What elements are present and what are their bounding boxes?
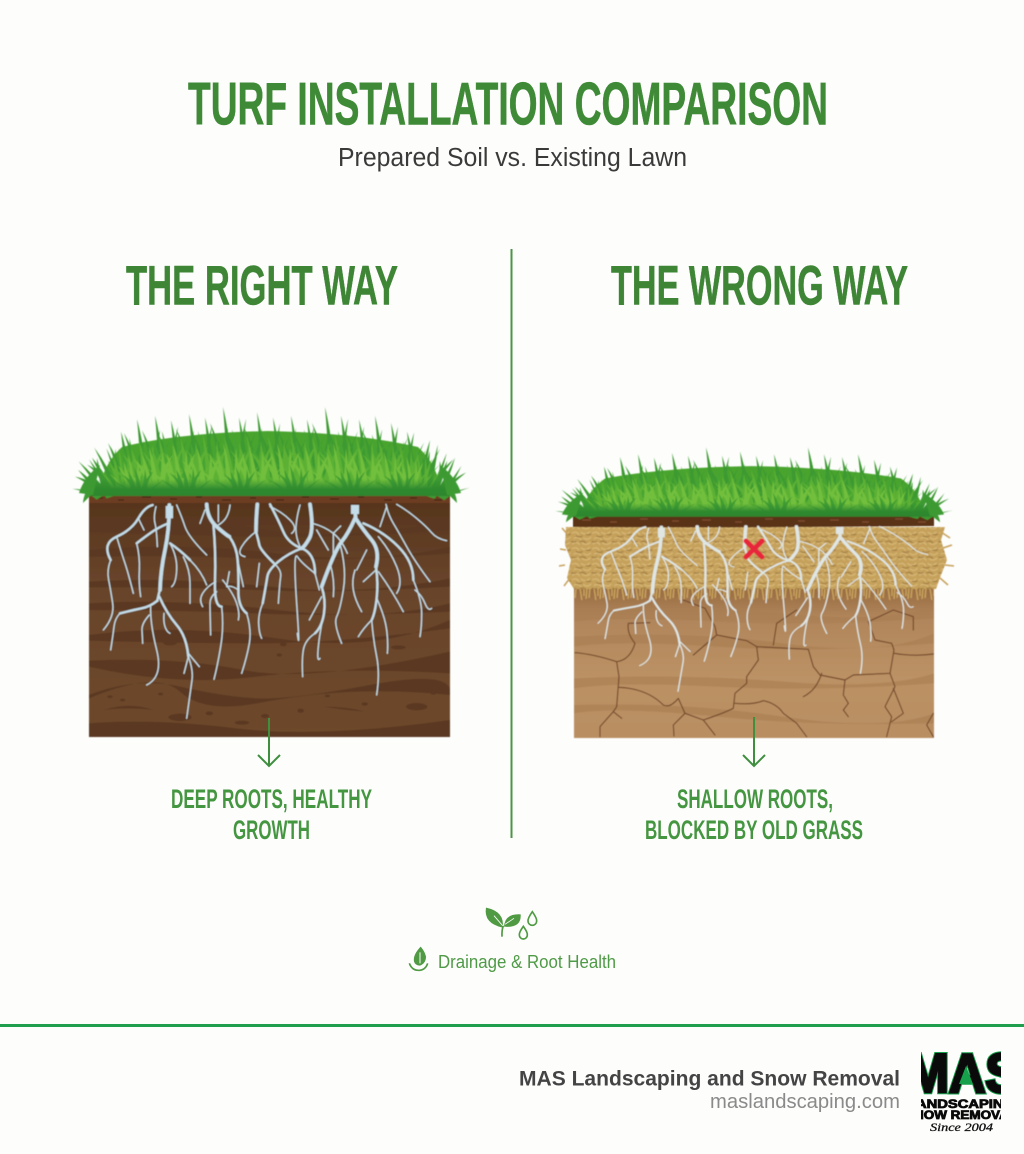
label: drainage and root health: Drainage & Root Health	[438, 952, 616, 972]
thatch side strands	[559, 528, 954, 586]
footer website: maslandscaping.com	[710, 1091, 900, 1113]
arrow: wrong way	[743, 717, 765, 766]
dry soil body	[574, 586, 934, 738]
soil body	[89, 495, 450, 737]
illustration: healthy soil cross-section	[62, 407, 479, 738]
dark topsoil strip	[573, 515, 934, 527]
roots through thatch	[598, 527, 928, 691]
logo: LANDSCAPING	[907, 1099, 1015, 1111]
topsoil strip	[89, 493, 450, 503]
soil bands	[89, 548, 450, 737]
logo: SNOW REMOVAL	[905, 1110, 1017, 1122]
illustration: thatch-blocked soil cross-section	[545, 447, 962, 738]
heading: the right way: THE RIGHT WAY	[126, 254, 398, 316]
footer company name: MAS Landscaping and Snow Removal	[519, 1066, 900, 1090]
arrow: right way	[258, 718, 280, 766]
icon: leaves and water drops	[486, 908, 537, 939]
cracks in soil	[575, 600, 933, 737]
icon: red x	[746, 541, 762, 557]
center divider	[510, 249, 512, 838]
footer rule	[0, 1024, 1024, 1027]
caption: right way	[171, 784, 372, 845]
caption: wrong way: SHALLOW ROOTS,	[677, 784, 833, 814]
caption: right way: GROWTH	[233, 815, 310, 845]
caption: wrong way: BLOCKED BY OLD GRASS	[645, 815, 863, 845]
logo	[921, 1051, 1001, 1132]
caption: wrong way	[645, 784, 863, 845]
thatch fringe	[574, 586, 934, 600]
thatch layer of old grass	[565, 527, 947, 589]
subtitle: Prepared Soil vs. Existing Lawn	[338, 144, 687, 172]
roots	[103, 504, 447, 718]
grass	[62, 407, 479, 508]
icon: leaf in cupped hand	[409, 947, 428, 970]
dry soil bands	[574, 636, 934, 724]
caption: right way: DEEP ROOTS, HEALTHY	[171, 784, 372, 814]
logo: Since 2004	[930, 1120, 993, 1134]
grass	[545, 447, 962, 526]
